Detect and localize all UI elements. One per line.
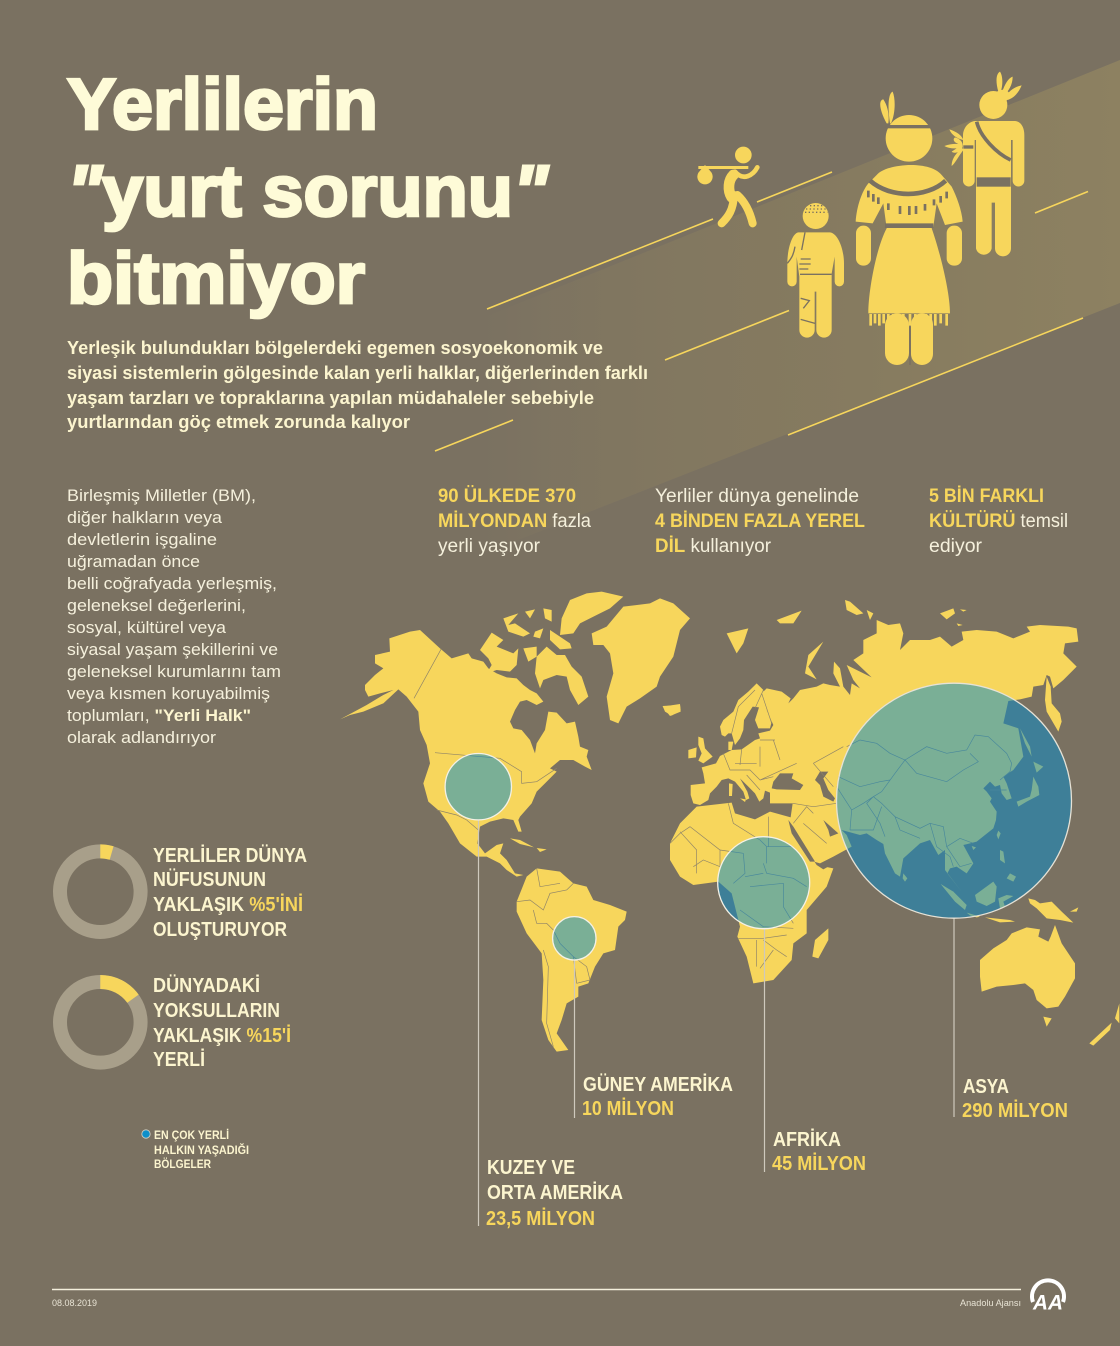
left definition text: sosyal, kültürel veya <box>67 618 227 637</box>
left definition text: geleneksel kurumlarını tam <box>67 662 281 681</box>
label: asia: ASYA <box>963 1076 1009 1098</box>
intro paragraph: siyasi sistemlerin gölgesinde kalan yerli halklar, diğerlerinden farklı <box>67 363 648 383</box>
map: country borders americas <box>414 649 590 1047</box>
map: americas <box>340 592 690 1052</box>
stat: 4000 languages: 4 BİNDEN FAZLA YEREL <box>655 511 865 532</box>
circle: north america <box>445 754 511 820</box>
stat: 5000 cultures <box>929 486 1068 557</box>
left definition text: devletlerin işgaline <box>67 530 217 549</box>
logo: Anadolu Ajansi: AA <box>1032 1292 1063 1314</box>
footer rule <box>52 1288 1021 1290</box>
legend: EN ÇOK YERLİ <box>154 1127 229 1142</box>
label: north and central america <box>486 1157 623 1230</box>
donut text: 5 percent <box>153 844 307 941</box>
label: north and central america: ORTA AMERİKA <box>487 1181 623 1204</box>
stat: 370 million: 90 ÜLKEDE 370 <box>438 486 576 507</box>
circle: africa <box>718 837 810 929</box>
map: country borders eurasia africa <box>670 690 1012 968</box>
label: africa <box>772 1128 866 1175</box>
stat: 4000 languages: Yerliler dünya genelinde <box>655 486 859 507</box>
title: "yurt sorunu" <box>67 152 549 232</box>
icon: man with feather <box>944 72 1024 256</box>
map: inland seas <box>772 772 840 869</box>
date: 08.08.2019 <box>52 1298 97 1308</box>
stat: 5000 cultures: 5 BİN FARKLI <box>929 486 1044 507</box>
left definition text: diğer halkların veya <box>67 508 223 527</box>
left definition text: belli coğrafyada yerleşmiş, <box>67 574 277 593</box>
stat: 5000 cultures: ediyor <box>929 536 983 557</box>
left definition text: siyasal yaşam şekillerini ve <box>67 640 278 659</box>
left definition text: veya kısmen koruyabilmiş <box>67 684 270 703</box>
label: south america <box>582 1073 733 1120</box>
left definition text: uğramadan önce <box>67 552 200 571</box>
label: asia: 290 MİLYON <box>962 1099 1068 1122</box>
icon: child <box>787 203 844 338</box>
donut text: 15 percent: DÜNYADAKİ <box>153 974 260 997</box>
left definition text: geleneksel değerlerini, <box>67 596 246 615</box>
label: africa: AFRİKA <box>773 1128 841 1151</box>
donut chart: 5 percent <box>60 851 141 932</box>
label: north and central america: KUZEY VE <box>487 1157 575 1179</box>
diagonal road lines <box>435 172 1088 451</box>
left definition text: Birleşmiş Milletler (BM), <box>67 486 256 505</box>
diagonal light band <box>480 60 1120 555</box>
title: Yerlilerin <box>67 65 378 145</box>
intro paragraph: yurtlarından göç etmek zorunda kalıyor <box>67 412 410 432</box>
icon: woman in dress <box>856 92 963 365</box>
label: asia <box>962 1076 1068 1122</box>
intro paragraph: yaşam tarzları ve topraklarına yapılan müdahaleler sebebiyle <box>67 388 594 408</box>
circle: asia <box>836 683 1072 918</box>
legend: HALKIN YAŞADIĞI <box>154 1142 249 1157</box>
label: south america: 10 MİLYON <box>582 1097 674 1120</box>
left definition text <box>67 486 281 747</box>
stat: 5000 cultures: KÜLTÜRÜ temsil <box>929 511 1068 532</box>
stat: 370 million: yerli yaşıyor <box>438 536 541 557</box>
legend <box>142 1127 249 1171</box>
world map <box>340 592 1119 1052</box>
stat: 4000 languages <box>655 486 865 557</box>
intro paragraph: Yerleşik bulundukları bölgelerdeki egemen sosyoekonomik ve <box>67 338 603 358</box>
label: north and central america: 23,5 MİLYON <box>486 1207 595 1230</box>
donut text: 15 percent <box>153 974 291 1071</box>
donut text: 5 percent: YAKLAŞIK %5'İNİ <box>153 893 303 916</box>
stat: 4000 languages: DİL kullanıyor <box>655 536 772 557</box>
stat: 370 million <box>438 486 591 557</box>
title: bitmiyor <box>67 239 365 319</box>
donut text: 5 percent: NÜFUSUNUN <box>153 868 266 891</box>
label: south america: GÜNEY AMERİKA <box>583 1073 733 1096</box>
donut chart: 15 percent <box>60 982 141 1063</box>
intro paragraph <box>67 338 648 432</box>
icon: walker with bundle <box>697 147 757 223</box>
donut text: 5 percent: YERLİLER DÜNYA <box>153 844 307 867</box>
circle: south america <box>553 917 596 960</box>
donut text: 15 percent: YAKLAŞIK %15'İ <box>153 1024 291 1047</box>
donut text: 15 percent: YOKSULLARIN <box>153 1000 280 1022</box>
icon: migrating people <box>697 72 1024 365</box>
leader lines <box>478 820 954 1226</box>
logo: Anadolu Ajansi <box>1032 1280 1064 1314</box>
title <box>67 65 549 319</box>
label: africa: 45 MİLYON <box>772 1152 866 1175</box>
map: europe asia africa oceania <box>663 600 1119 1046</box>
agency name: Anadolu Ajansı <box>960 1298 1021 1309</box>
left definition text: olarak adlandırıyor <box>67 728 216 747</box>
left definition text: toplumları, "Yerli Halk" <box>67 706 251 725</box>
donut text: 5 percent: OLUŞTURUYOR <box>153 919 287 941</box>
donut text: 15 percent: YERLİ <box>153 1048 205 1071</box>
legend: BÖLGELER <box>154 1156 211 1171</box>
stat: 370 million: MİLYONDAN fazla <box>438 511 591 532</box>
